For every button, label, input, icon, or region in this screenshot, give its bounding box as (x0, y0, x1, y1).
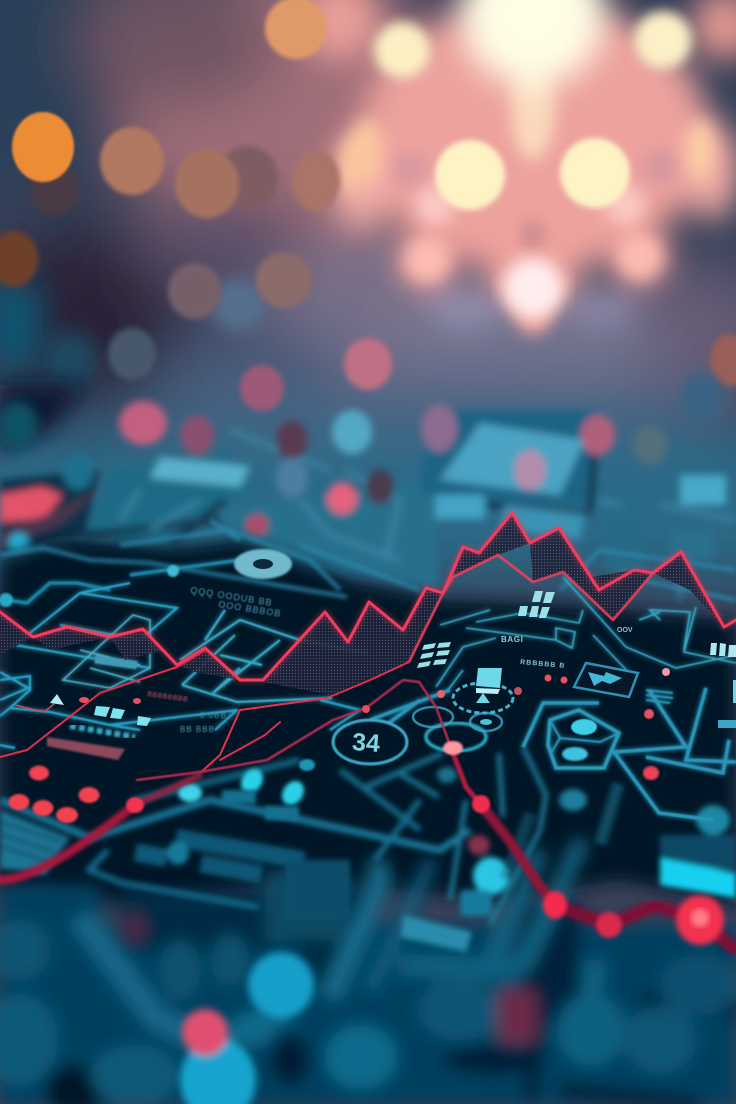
bokeh chandelier glow (300, 0, 736, 333)
chart hatch fill (0, 513, 724, 695)
board edge traces above chart (0, 520, 736, 600)
chip card and hexagon components: RBBBBB B (520, 659, 566, 670)
small circuit details, right (436, 577, 736, 690)
red pads (8, 766, 100, 823)
blurred far circuit board (0, 401, 736, 600)
number label: 34: 34 (351, 728, 381, 758)
sharp circuit traces (0, 560, 367, 748)
dark sharp board base (0, 540, 736, 905)
small circuit labels and details, left: QQQ OODUB BB (190, 585, 273, 608)
small circuit labels and details, left: 0 0BB (200, 711, 227, 720)
bright blurred nodes (180, 952, 314, 1104)
chart data points (126, 705, 724, 945)
upper red line chart (0, 513, 736, 773)
small circuit labels and details, left: BBBBBBBB (147, 691, 189, 704)
bottom blurred board (0, 840, 736, 1104)
lower red line chart (0, 680, 736, 950)
chip card and hexagon components (417, 591, 736, 780)
bokeh lights (0, 0, 736, 449)
small circuit labels and details, left (0, 549, 315, 820)
small circuit labels and details, left: BB BBB (180, 725, 215, 734)
number dial and ring cluster (333, 668, 513, 764)
small circuit labels and details, left: OOO BBBOB (218, 599, 282, 619)
chip card and hexagon components: BAGI (501, 635, 523, 644)
lower midground blurred components (0, 747, 736, 952)
chip card and hexagon components: OOV (617, 627, 633, 634)
